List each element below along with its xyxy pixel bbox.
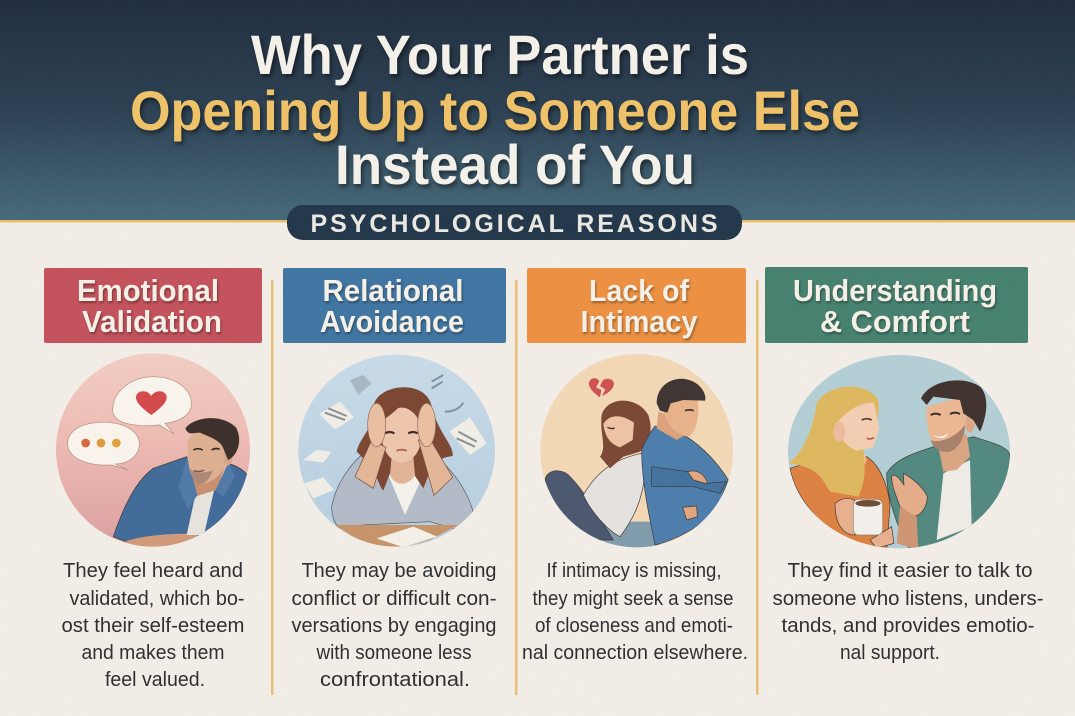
text: relational avoidance: confrontational. bbox=[320, 669, 470, 691]
text: relational avoidance bbox=[292, 560, 496, 691]
panel: lack of intimacy bbox=[522, 268, 748, 664]
heading: understanding and comfort: Understanding bbox=[793, 273, 997, 308]
text: relational avoidance: versations by engaging bbox=[292, 615, 496, 637]
heading: understanding and comfort: & Comfort bbox=[820, 304, 970, 339]
text: understanding and comfort: nal support. bbox=[840, 642, 940, 664]
text: emotional validation: validated, which bo- bbox=[70, 588, 244, 610]
heading: relational avoidance bbox=[283, 268, 506, 343]
panel: understanding and comfort bbox=[765, 267, 1044, 664]
illustration: stressed woman at desk bbox=[297, 353, 497, 550]
illustration: man with speech bubbles bbox=[50, 350, 257, 550]
text: relational avoidance: They may be avoiding bbox=[302, 560, 496, 582]
panel: relational avoidance bbox=[283, 268, 506, 691]
text: understanding and comfort: someone who listens, unders- bbox=[772, 588, 1044, 610]
title: Why Your Partner is bbox=[251, 23, 749, 86]
heading: emotional validation bbox=[44, 268, 262, 343]
heading: understanding and comfort bbox=[765, 267, 1028, 343]
text: understanding and comfort bbox=[772, 560, 1044, 664]
heading: relational avoidance: Avoidance bbox=[320, 304, 464, 339]
heading: lack of intimacy bbox=[527, 268, 746, 343]
text: emotional validation bbox=[62, 560, 244, 691]
title: Instead of You bbox=[335, 133, 695, 196]
illustration: couple talking over coffee bbox=[783, 350, 1017, 553]
header band bbox=[0, 0, 1075, 222]
title: Opening Up to Someone Else bbox=[130, 79, 860, 142]
text: lack of intimacy bbox=[522, 560, 748, 664]
text: emotional validation: They feel heard and bbox=[63, 560, 243, 582]
heading: lack of intimacy: Lack of bbox=[589, 273, 690, 308]
text: emotional validation: and makes them bbox=[82, 642, 224, 664]
text: relational avoidance: with someone less bbox=[316, 642, 472, 664]
panel: emotional validation bbox=[44, 268, 262, 691]
heading: emotional validation: Emotional bbox=[77, 273, 219, 308]
illustration: couple back to back bbox=[537, 350, 737, 552]
text: lack of intimacy: If intimacy is missing, bbox=[546, 560, 722, 582]
title bbox=[130, 23, 860, 196]
text: emotional validation: feel valued. bbox=[105, 669, 205, 691]
column dividers bbox=[271, 280, 758, 695]
text: lack of intimacy: they might seek a sense bbox=[532, 588, 734, 610]
text: understanding and comfort: tands, and provides emotio- bbox=[782, 615, 1034, 637]
heading: emotional validation: Validation bbox=[82, 304, 222, 339]
text: lack of intimacy: nal connection elsewhere. bbox=[522, 642, 748, 664]
text: emotional validation: ost their self-esteem bbox=[62, 615, 244, 637]
text: understanding and comfort: They find it easier to talk to bbox=[788, 560, 1032, 582]
heading: lack of intimacy: Intimacy bbox=[580, 304, 698, 339]
text: lack of intimacy: of closeness and emoti- bbox=[535, 615, 733, 637]
text: relational avoidance: conflict or difficult con- bbox=[292, 588, 496, 610]
subtitle pill: PSYCHOLOGICAL REASONS bbox=[310, 210, 718, 238]
heading: relational avoidance: Relational bbox=[322, 273, 464, 308]
